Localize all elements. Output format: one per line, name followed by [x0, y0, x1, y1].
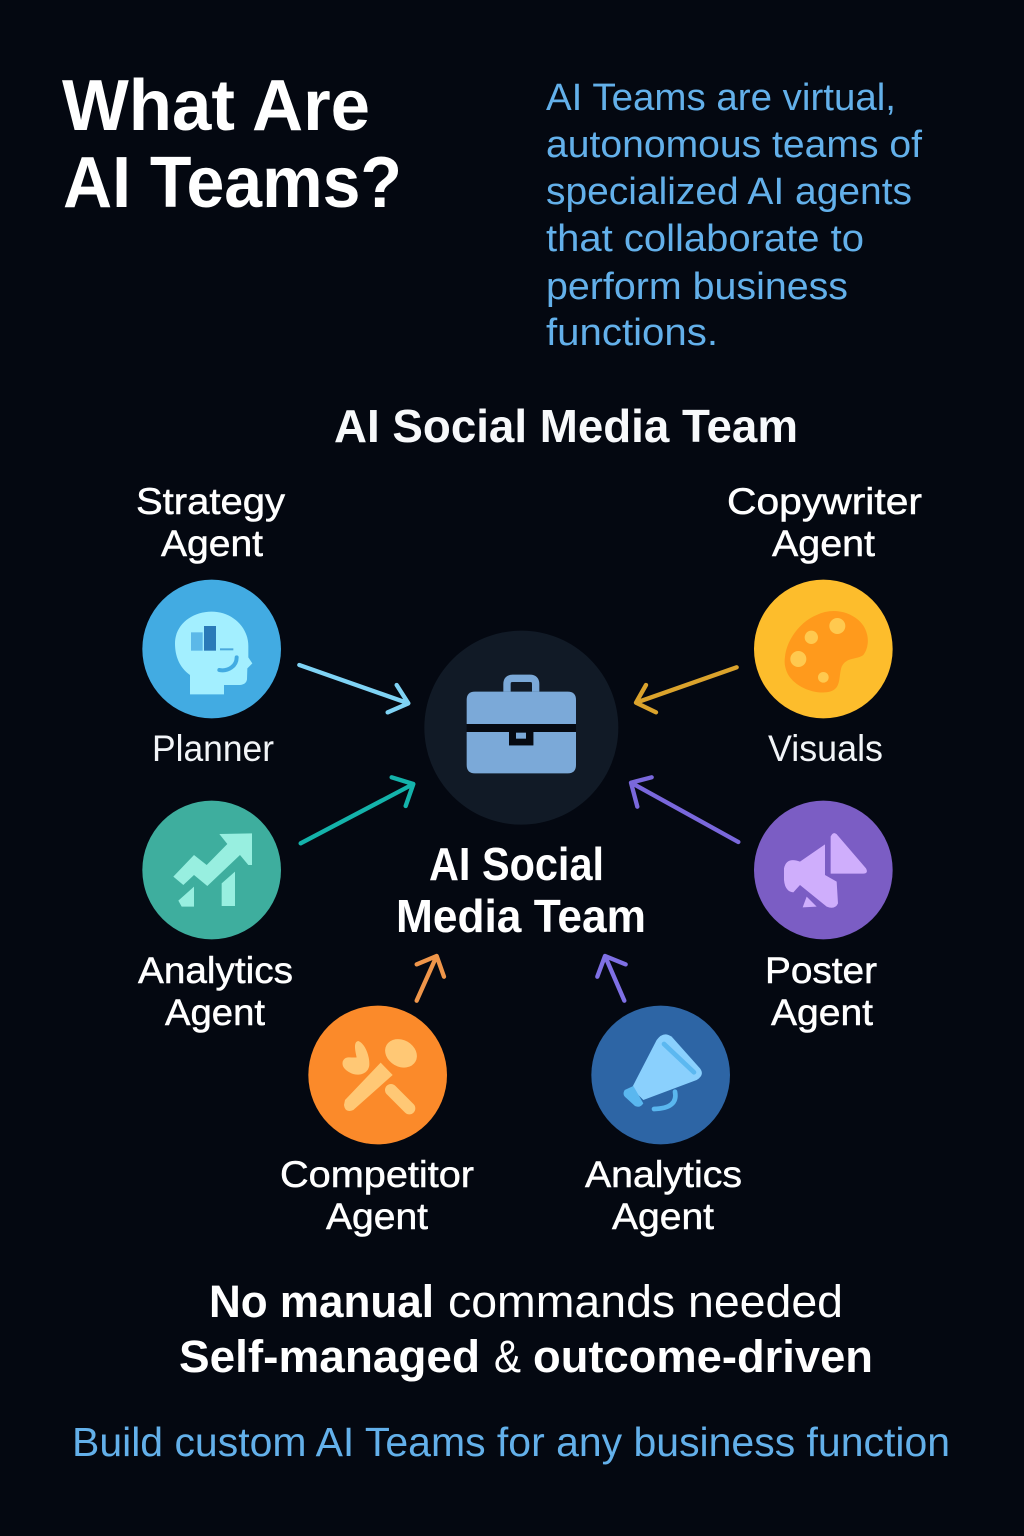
- icon: analytics megaphone: [591, 1006, 730, 1144]
- icon: poster megaphone: [754, 801, 893, 939]
- label: copywriter agent: Copywriter: [727, 481, 922, 522]
- label: strategy agent: [136, 481, 286, 564]
- label: competitor agent: Agent: [326, 1196, 429, 1237]
- label: AI social media team: AI Social: [429, 838, 604, 890]
- arrow: planner to centre: [299, 665, 408, 712]
- description text block: perform business: [546, 266, 848, 308]
- arrow: analytics bottom to centre: [597, 956, 626, 1001]
- title: AI Teams?: [63, 143, 402, 223]
- icon: palette: [754, 580, 893, 718]
- label: poster agent: [765, 950, 877, 1033]
- summary statement: No manual: [209, 1276, 434, 1327]
- description text block: autonomous teams of: [546, 124, 922, 166]
- summary statement: Self-managed: [179, 1331, 480, 1382]
- title: [62, 66, 402, 223]
- call to action: Build custom AI Teams for any business function: [72, 1419, 950, 1465]
- diagram heading: AI Social Media Team: [334, 400, 798, 452]
- icon: planner head: [142, 580, 281, 718]
- summary statement: commands needed: [448, 1276, 843, 1327]
- arrow: visuals to centre: [636, 667, 737, 712]
- label: strategy agent: Agent: [161, 523, 264, 564]
- label: poster agent: Poster: [765, 950, 877, 991]
- description text block: specialized AI agents: [546, 171, 912, 213]
- description text block: AI Teams are virtual,: [546, 77, 896, 119]
- label: analytics agent left: [138, 950, 293, 1033]
- label: analytics agent left: Analytics: [138, 950, 293, 991]
- arrow: poster to centre: [631, 777, 738, 842]
- label: analytics agent bottom: Analytics: [585, 1154, 742, 1195]
- label: planner: Planner: [152, 728, 274, 769]
- label: copywriter agent: Agent: [772, 523, 876, 564]
- label: poster agent: Agent: [771, 992, 874, 1033]
- label: strategy agent: Strategy: [136, 481, 286, 522]
- label: analytics agent bottom: [585, 1154, 742, 1237]
- label: visuals: Visuals: [768, 728, 883, 769]
- label: copywriter agent: [727, 481, 922, 564]
- central hub: briefcase: [424, 631, 618, 825]
- icon: competitor tools: [308, 1006, 447, 1144]
- description text block: [546, 77, 922, 354]
- label: analytics agent left: Agent: [165, 992, 266, 1033]
- arrow: analytics to centre: [301, 777, 413, 843]
- label: analytics agent bottom: Agent: [612, 1196, 715, 1237]
- arrow: competitor to centre: [417, 956, 444, 1001]
- icon: analytics growth chart: [142, 801, 281, 939]
- summary statement: outcome-driven: [533, 1331, 873, 1382]
- description text block: functions.: [546, 312, 718, 354]
- label: competitor agent: [280, 1154, 474, 1237]
- label: AI social media team: [396, 838, 646, 942]
- title: What Are: [62, 66, 370, 146]
- label: competitor agent: Competitor: [280, 1154, 474, 1195]
- summary statement: [179, 1276, 873, 1382]
- summary statement: &: [494, 1331, 521, 1382]
- label: AI social media team: Media Team: [396, 890, 646, 942]
- description text block: that collaborate to: [546, 218, 864, 260]
